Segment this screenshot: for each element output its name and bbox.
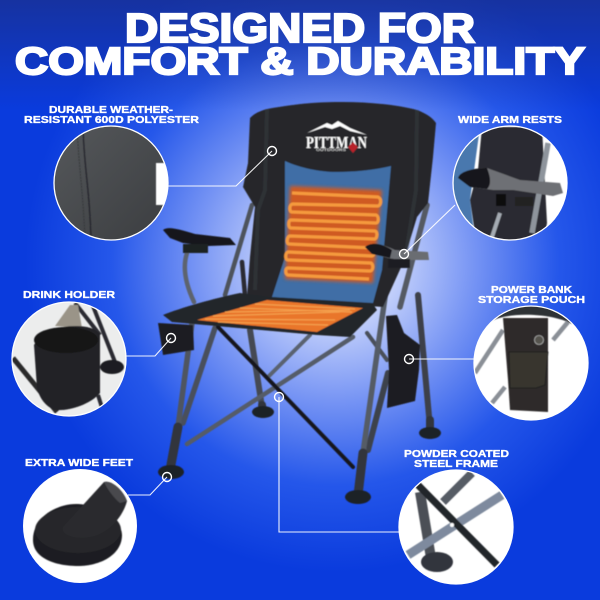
- logo: [306, 121, 368, 153]
- logo: OUTDOORS: [316, 147, 346, 152]
- label: polyester: DURABLE WEATHER-: [49, 105, 173, 116]
- title: COMFORT & DURABILITY: [15, 41, 585, 83]
- panel: powder coated steel frame: [399, 470, 513, 584]
- label: polyester: RESISTANT 600D POLYESTER: [24, 115, 200, 126]
- logo: PITTMAN: [306, 133, 368, 152]
- label: powder coated steel frame: STEEL FRAME: [414, 459, 498, 470]
- label: power bank pouch: STORAGE POUCH: [478, 295, 585, 306]
- heat glow back: [285, 186, 382, 283]
- heating coil: [286, 193, 381, 279]
- callout markers: [162, 146, 414, 482]
- panel: power bank pouch: [474, 300, 588, 420]
- power bank pouch: [386, 315, 420, 408]
- heated seat: [197, 300, 363, 332]
- chair feet: [158, 406, 441, 504]
- panel: drink holder: [12, 302, 126, 416]
- chair back: [243, 102, 436, 307]
- label: wide arm rests: WIDE ARM RESTS: [458, 115, 562, 126]
- label: polyester: [24, 105, 200, 126]
- label: drink holder: DRINK HOLDER: [23, 290, 116, 301]
- label: extra wide feet: EXTRA WIDE FEET: [25, 458, 133, 469]
- label: powder coated steel frame: [404, 449, 509, 470]
- seat: [163, 293, 377, 337]
- title: DESIGNED FOR: [125, 5, 475, 51]
- label: power bank pouch: POWER BANK: [491, 285, 573, 296]
- chair frame and legs: [170, 205, 430, 495]
- label: powder coated steel frame: POWDER COATED: [404, 449, 509, 460]
- heated blue panel: [272, 161, 391, 303]
- callout lines: [126, 151, 474, 532]
- left arm rest: [163, 228, 236, 246]
- panel: polyester: [54, 126, 169, 240]
- right arm rest: [365, 244, 429, 268]
- drink holder pouch: [158, 323, 194, 355]
- panel: extra wide feet: [23, 469, 137, 583]
- label: power bank pouch: [478, 285, 585, 306]
- chair: [158, 102, 441, 504]
- panel: wide arm rests: [453, 126, 567, 240]
- title: [15, 5, 585, 83]
